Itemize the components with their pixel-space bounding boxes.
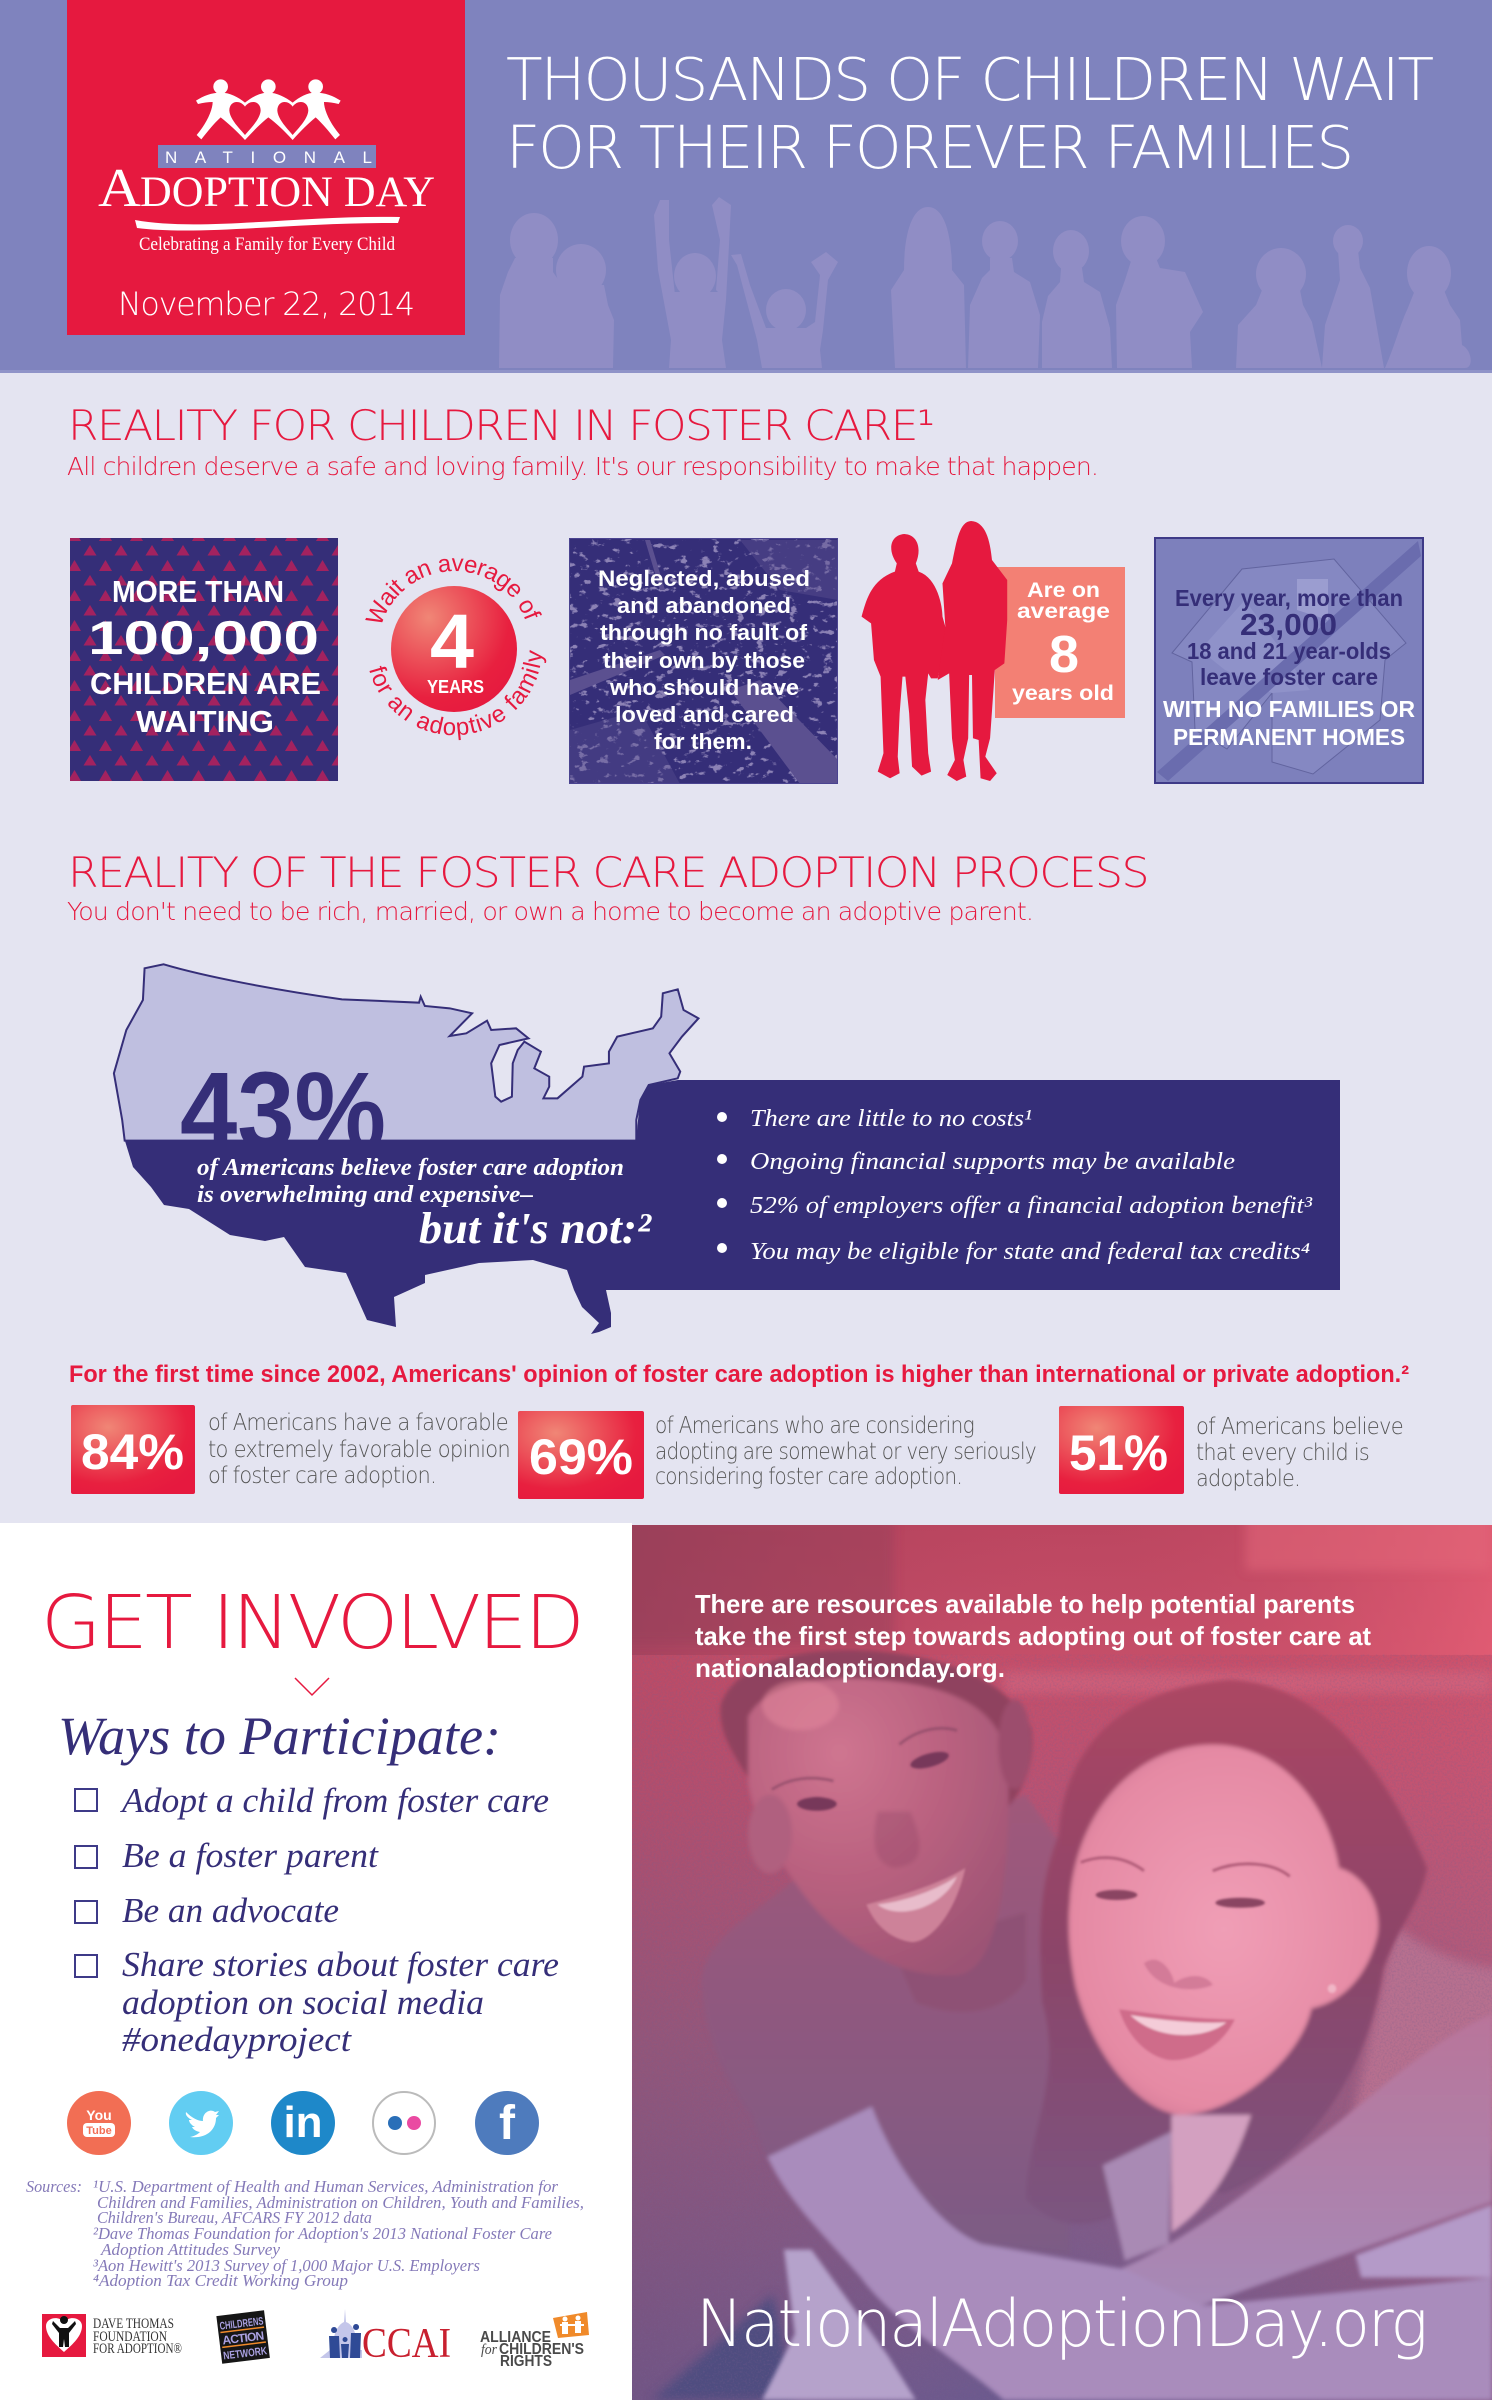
ways to participate heading: Ways to Participate:: [58, 1706, 501, 1766]
map statement: [197, 1155, 652, 1253]
cost bullet list: There are little to no costs¹: [750, 1106, 1032, 1132]
tile: 23,000 leave foster care: leave foster care: [1200, 664, 1378, 690]
43 percent figure: 43%: [180, 1050, 386, 1173]
map statement: is overwhelming and expensive–: [197, 1182, 533, 1208]
map upper half: [114, 964, 698, 1141]
get involved heading: GET INVOLVED: [41, 1580, 582, 1666]
icon: youtube: [67, 2091, 131, 2155]
woman neck and top: [1171, 2115, 1251, 2233]
cost bullet list: [717, 1106, 1313, 1265]
woman hair: [1026, 1680, 1427, 2224]
header title: FOR THEIR FOREVER FAMILIES: [506, 113, 1352, 182]
tile: 100,000 children waiting: 100,000: [88, 611, 319, 664]
callout: average age 8: years old: [1012, 682, 1114, 705]
stat: 84%: 84%: [81, 1424, 184, 1480]
photo caption: [695, 1589, 1371, 1683]
logo: adoption day: Celebrating a Family for Every Child: [139, 234, 395, 255]
tile: 100,000 children waiting: [70, 538, 338, 781]
stat: 69%: considering foster care adoption.: [655, 1464, 962, 1490]
tile: 23,000 leave foster care: [1155, 538, 1423, 783]
children silhouettes: [499, 197, 1471, 368]
stat: 84%: of foster care adoption.: [208, 1463, 436, 1489]
sources: Adoption Attitudes Survey: [100, 2240, 280, 2259]
logo: dave thomas foundation: FOR ADOPTION®: [93, 2341, 182, 2357]
badge: wait 4 years: 4: [430, 599, 474, 685]
checklist: Be a foster parent: [122, 1836, 379, 1875]
icon: linkedin: [271, 2091, 335, 2155]
stat: 69%: 69%: [529, 1429, 633, 1485]
panel: get involved: [0, 1523, 632, 2400]
section heading: reality for children: All children deserve a safe and loving family. It's our responsibility to make that happen.: [67, 452, 1098, 481]
logo: dave thomas foundation: DAVE THOMAS: [93, 2316, 174, 2332]
logo: alliance for childrens rights: [480, 2312, 589, 2370]
tile: 23,000 leave foster care: WITH NO FAMILIES OR: [1163, 696, 1415, 722]
header title: THOUSANDS OF CHILDREN WAIT: [506, 45, 1433, 114]
section heading: adoption process: [67, 848, 1148, 926]
logo: national bar: NATIONAL: [165, 148, 372, 167]
tile: neglected, abused: Neglected, abused: [598, 566, 810, 591]
tile: neglected, abused: [569, 538, 838, 784]
logo: adoption day: A: [98, 157, 141, 218]
logo: alliance for childrens rights: for: [481, 2342, 497, 2358]
tile: 23,000 leave foster care: PERMANENT HOMES: [1173, 724, 1405, 750]
checklist: Adopt a child from foster care: [120, 1781, 549, 1820]
stat: 51%: that every child is: [1196, 1440, 1369, 1466]
tile: 100,000 children waiting: CHILDREN ARE: [90, 666, 321, 701]
map of United States with 43%: [114, 964, 1340, 1334]
sources: Children's Bureau, AFCARS FY 2012 data: [97, 2208, 372, 2227]
boy neck: [906, 1949, 1022, 2010]
callout: average age 8: [995, 567, 1125, 718]
boy hair: [720, 1650, 1032, 1812]
stat: 51%: [1059, 1406, 1403, 1494]
woman face: [1069, 1744, 1378, 2115]
logo: ccai: CCAI: [362, 2321, 451, 2367]
tile: neglected, abused: and abandoned: [617, 593, 791, 618]
stat: 84%: of Americans have a favorable: [208, 1410, 508, 1436]
logo: paper dolls: [196, 79, 341, 140]
logo: adoption day: [98, 157, 435, 255]
section heading: adoption process: You don't need to be rich, married, or own a home to become an adoptive parent.: [67, 897, 1033, 926]
map lower half and list panel: [125, 1080, 1340, 1334]
section heading: adoption process: REALITY OF THE FOSTER CARE ADOPTION PROCESS: [68, 848, 1148, 897]
icon: house with slash: [1157, 541, 1421, 781]
tile: neglected, abused: their own by those: [603, 648, 805, 673]
woman arm and shoulder: [1345, 1924, 1492, 2154]
section heading: reality for children: [67, 401, 1098, 481]
stat: 69%: [518, 1411, 1036, 1499]
callout: average age 8: 8: [1049, 626, 1079, 684]
checklist: [75, 1781, 559, 2059]
icon: youtube: You: [86, 2107, 112, 2123]
map statement: of Americans believe foster care adoption: [197, 1155, 624, 1181]
logo: dave thomas foundation: [42, 2314, 182, 2357]
callout: average age 8: average: [1017, 600, 1110, 623]
logo panel: [67, 0, 465, 335]
stat: 51%: 51%: [1069, 1425, 1168, 1481]
tile: 23,000 leave foster care: Every year, more than: [1175, 585, 1403, 611]
section heading: reality for children: REALITY FOR CHILDREN IN FOSTER CARE¹: [68, 401, 933, 450]
icon: silhouette of two children: [862, 521, 1007, 781]
cost bullet list: Ongoing financial supports may be available: [750, 1149, 1235, 1175]
logo: childrens action network: CHILDRENS: [219, 2315, 264, 2333]
sources: Sources:: [26, 2177, 82, 2196]
badge: wait 4 years: Wait an average of: [365, 558, 542, 622]
tile: neglected, abused: who should have: [609, 675, 799, 700]
checklist: adoption on social media: [122, 1983, 484, 2022]
photo caption: nationaladoptionday.org.: [695, 1653, 1005, 1683]
checklist: Be an advocate: [122, 1891, 339, 1930]
sources: Children and Families, Administration on Children, Youth and Families,: [97, 2193, 584, 2212]
sources: ¹U.S. Department of Health and Human Services, Administration for: [93, 2177, 558, 2196]
callout: average age 8: Are on: [1027, 579, 1100, 602]
logo: alliance for childrens rights: ALLIANCE: [480, 2329, 551, 2346]
header title: [506, 45, 1433, 182]
badge: wait 4 years: for an adoptive family: [370, 650, 546, 740]
cost bullet list: You may be eligible for state and federal tax credits⁴: [750, 1239, 1310, 1265]
cost bullet list: 52% of employers offer a financial adoption benefit³: [750, 1193, 1313, 1219]
tile: neglected, abused: loved and cared: [615, 702, 794, 727]
logo: alliance for childrens rights: CHILDREN'S: [499, 2341, 584, 2358]
stat: 84%: to extremely favorable opinion: [208, 1437, 510, 1463]
icon: facebook: f: [499, 2097, 516, 2150]
stat: 69%: adopting are somewhat or very seriously: [655, 1439, 1036, 1465]
tile: 23,000 leave foster care: 23,000: [1240, 607, 1337, 642]
header band: [0, 0, 1492, 373]
sources: ⁴Adoption Tax Credit Working Group: [93, 2271, 348, 2290]
badge: wait 4 years: [365, 558, 546, 740]
horizon: [1004, 1672, 1492, 1694]
tile: 23,000 leave foster care: 18 and 21 year-olds: [1187, 638, 1391, 664]
icon: youtube: Tube: [86, 2125, 112, 2137]
photo caption: There are resources available to help potential parents: [695, 1589, 1355, 1619]
event date: November 22, 2014: [118, 285, 414, 323]
sources: [26, 2177, 584, 2290]
logo: childrens action network: ACTION: [222, 2328, 265, 2347]
website url: NationalAdoptionDay.org: [696, 2287, 1426, 2362]
facial details: [772, 1728, 1336, 2060]
checklist: Share stories about foster care: [122, 1945, 559, 1984]
icon: linkedin: in: [283, 2098, 323, 2147]
icon: flickr: [373, 2092, 435, 2154]
map statement: but it's not:²: [419, 1204, 652, 1253]
tile: 100,000 children waiting: MORE THAN: [112, 574, 284, 609]
panel: photo of mother and son: [619, 1509, 1492, 2400]
boy shirt: [702, 1796, 1056, 2108]
logo: ccai: [320, 2309, 451, 2367]
checklist: #onedayproject: [122, 2020, 352, 2059]
stat: 51%: of Americans believe: [1196, 1414, 1403, 1440]
logo: childrens action network: [216, 2310, 270, 2364]
sources: ³Aon Hewitt's 2013 Survey of 1,000 Major U.S. Employers: [93, 2256, 480, 2275]
arrow: chevron: [295, 1678, 329, 1695]
stat: 84%: [71, 1405, 510, 1494]
stat: 51%: adoptable.: [1196, 1466, 1300, 1492]
tile: neglected, abused: for them.: [654, 729, 752, 754]
badge: wait 4 years: YEARS: [427, 677, 484, 697]
lower-left dark clothing: [652, 2294, 795, 2400]
opinion headline: For the first time since 2002, Americans' opinion of foster care adoption is higher than international or private adoption.²: [69, 1361, 1409, 1388]
boy face: [748, 1679, 1009, 1976]
icon: twitter: [169, 2091, 233, 2155]
sources: ²Dave Thomas Foundation for Adoption's 2013 National Foster Care: [93, 2224, 552, 2243]
stat: 69%: of Americans who are considering: [655, 1413, 974, 1439]
logo: dave thomas foundation: FOUNDATION: [93, 2329, 167, 2345]
logo: alliance for childrens rights: RIGHTS: [500, 2353, 552, 2370]
logo: childrens action network: NETWORK: [223, 2345, 268, 2363]
logo: adoption day: DOPTION DAY: [140, 169, 435, 216]
tile: neglected, abused: through no fault of: [600, 620, 808, 645]
tile: 100,000 children waiting: WAITING: [136, 704, 274, 739]
icon: facebook: [475, 2091, 539, 2155]
photo caption: take the first step towards adopting out of foster care at: [695, 1621, 1371, 1651]
